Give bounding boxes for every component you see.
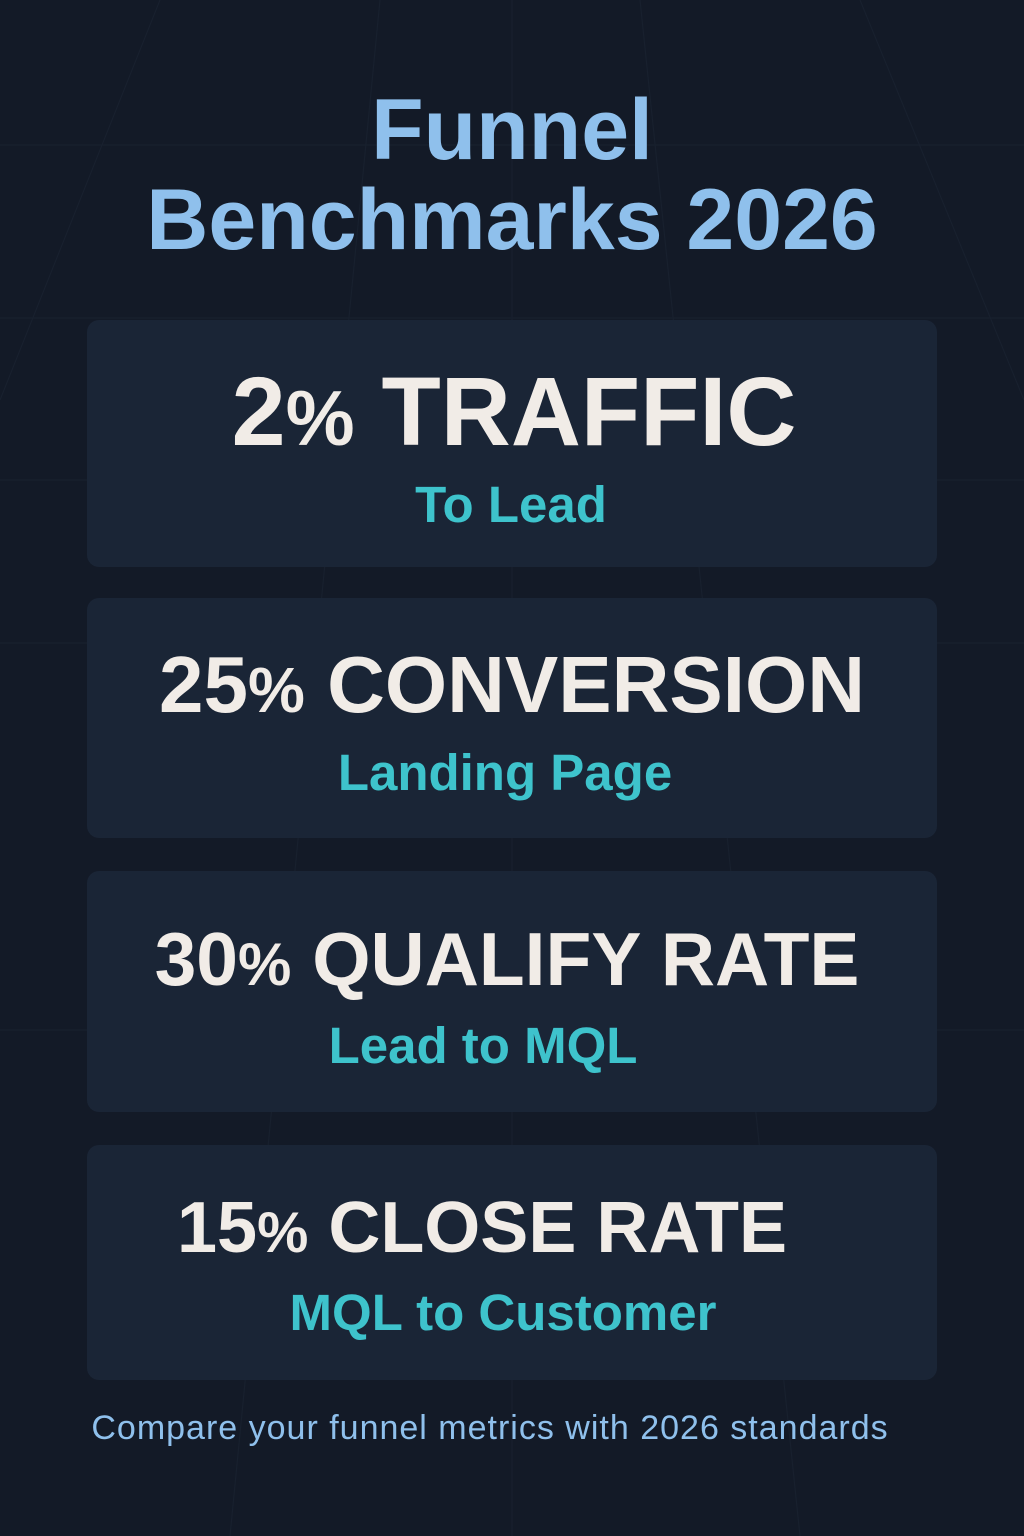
title [146, 82, 878, 268]
footer: Compare your funnel metrics with 2026 standards [91, 1409, 889, 1447]
stat: qualify: 30% QUALIFY RATE [155, 917, 859, 1001]
stat: traffic: 2% TRAFFIC [232, 357, 796, 466]
card: close [87, 1145, 937, 1380]
title: Funnel [371, 82, 653, 178]
card: conversion [87, 598, 937, 838]
sub: to lead: To Lead [415, 476, 607, 533]
stat: conversion: 25% CONVERSION [159, 640, 865, 729]
sub: mql to customer: MQL to Customer [290, 1284, 716, 1341]
stat: close: 15% CLOSE RATE [177, 1188, 787, 1268]
sub: lead to mql: Lead to MQL [329, 1017, 637, 1074]
card: qualify [87, 871, 937, 1112]
card: traffic [87, 320, 937, 567]
title: Benchmarks 2026 [146, 172, 878, 268]
sub: landing page: Landing Page [338, 744, 672, 801]
